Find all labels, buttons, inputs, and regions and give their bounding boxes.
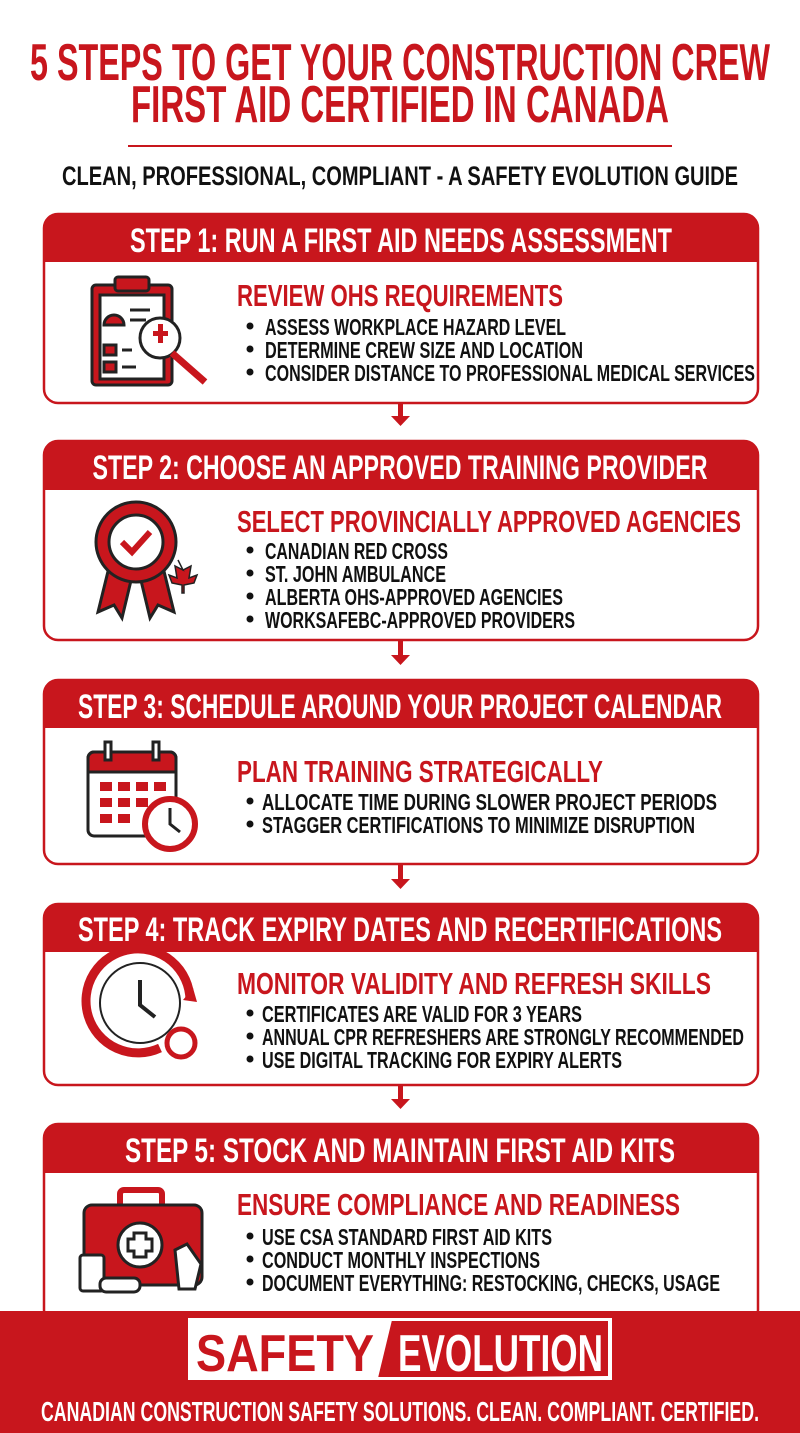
text: step 3: PLAN TRAINING STRATEGICALLY <box>237 754 603 789</box>
text: step 2: ST. JOHN AMBULANCE <box>265 561 446 587</box>
icon: clock with refresh arrow <box>86 949 197 1057</box>
text: step 4: CERTIFICATES ARE VALID FOR 3 YEARS <box>262 1001 582 1027</box>
panel: step 3 <box>44 680 758 864</box>
text: step 1: DETERMINE CREW SIZE AND LOCATION <box>265 337 583 363</box>
text: step 1 <box>237 278 755 386</box>
text: step 5 <box>237 1187 720 1296</box>
title <box>30 34 771 134</box>
panel: step 2 <box>44 441 758 640</box>
text: step 3 <box>237 754 717 838</box>
panel: step 4 <box>44 904 758 1085</box>
logo <box>188 1318 612 1383</box>
text: step 1: ASSESS WORKPLACE HAZARD LEVEL <box>265 314 566 340</box>
arrow <box>391 1086 410 1109</box>
text: step 1: REVIEW OHS REQUIREMENTS <box>237 278 563 313</box>
icon: calendar with clock <box>88 742 176 836</box>
arrow <box>391 404 410 426</box>
footer <box>0 1311 800 1433</box>
text: step 2: WORKSAFEBC-APPROVED PROVIDERS <box>265 607 575 633</box>
arrow <box>391 865 410 889</box>
icon: first aid kit <box>80 1190 202 1292</box>
text: step 4 <box>237 966 744 1073</box>
icon: award ribbon with maple leaf <box>96 502 176 618</box>
panel: step 1 <box>44 214 758 403</box>
icon: clipboard with magnifier <box>92 277 205 385</box>
logo: EVOLUTION <box>398 1325 603 1383</box>
arrow <box>391 641 410 665</box>
text: step 5: CONDUCT MONTHLY INSPECTIONS <box>262 1247 540 1273</box>
logo: SAFETY <box>196 1325 374 1383</box>
text: step 2: ALBERTA OHS-APPROVED AGENCIES <box>265 584 563 610</box>
text: step 2 <box>237 504 741 633</box>
text: step 4: USE DIGITAL TRACKING FOR EXPIRY ALERTS <box>262 1047 622 1073</box>
text: step 2: CANADIAN RED CROSS <box>265 538 448 564</box>
text: step 5: USE CSA STANDARD FIRST AID KITS <box>262 1224 552 1250</box>
panel: step 5 <box>44 1124 758 1324</box>
